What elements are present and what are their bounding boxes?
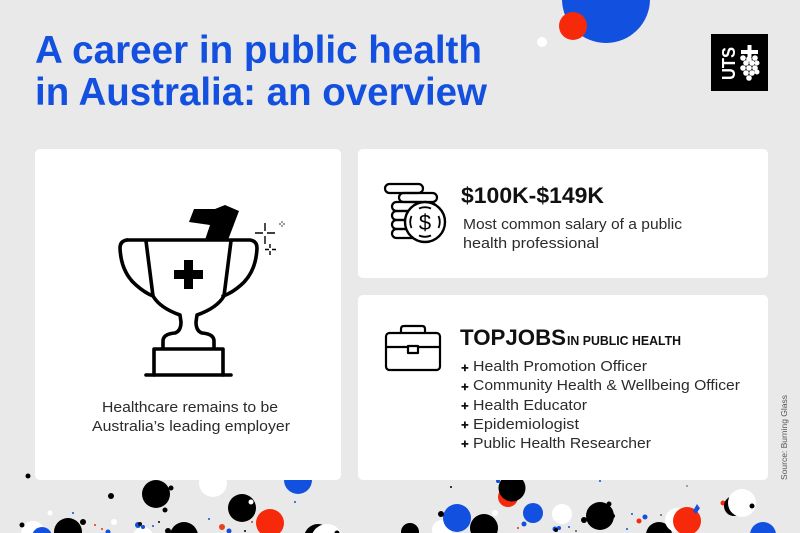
heading: salary range: $100K-$149K (461, 183, 604, 208)
icon: trophy (120, 205, 285, 375)
text: employer caption (92, 399, 290, 435)
title (35, 29, 488, 114)
icon: briefcase (386, 326, 440, 370)
list: jobs: Epidemiologist (473, 416, 580, 433)
panel: salary (358, 149, 768, 278)
title: A career in public health (35, 29, 482, 72)
list: jobs (462, 358, 740, 452)
icon: coins (385, 184, 445, 242)
list: jobs: Health Educator (473, 397, 587, 414)
icon: coins: $ (419, 210, 431, 235)
bottom decorative dots (20, 474, 776, 533)
title: in Australia: an overview (35, 71, 488, 114)
heading: top jobs: IN PUBLIC HEALTH (567, 333, 681, 348)
panel: leading employer (35, 149, 341, 480)
list: jobs: Community Health & Wellbeing Officer (473, 377, 740, 394)
text: salary description: health professional (463, 235, 599, 252)
bottom decorative dots behind cards (199, 466, 526, 507)
icon: sparkles (255, 221, 285, 255)
source note: Source: Burning Glass (780, 395, 789, 480)
text: employer caption: Healthcare remains to be (102, 399, 278, 416)
top decorative circles (537, 0, 650, 47)
text: salary description: Most common salary of a public (463, 216, 683, 233)
logo: UTS: UTS (719, 47, 739, 80)
list: jobs: Health Promotion Officer (473, 358, 647, 375)
heading: top jobs: TOPJOBS (460, 325, 566, 350)
text: salary description (463, 216, 683, 252)
panel: top jobs (358, 295, 768, 480)
logo: UTS (711, 34, 768, 91)
list: jobs: Public Health Researcher (473, 435, 651, 452)
text: employer caption: Australia’s leading employer (92, 418, 290, 435)
